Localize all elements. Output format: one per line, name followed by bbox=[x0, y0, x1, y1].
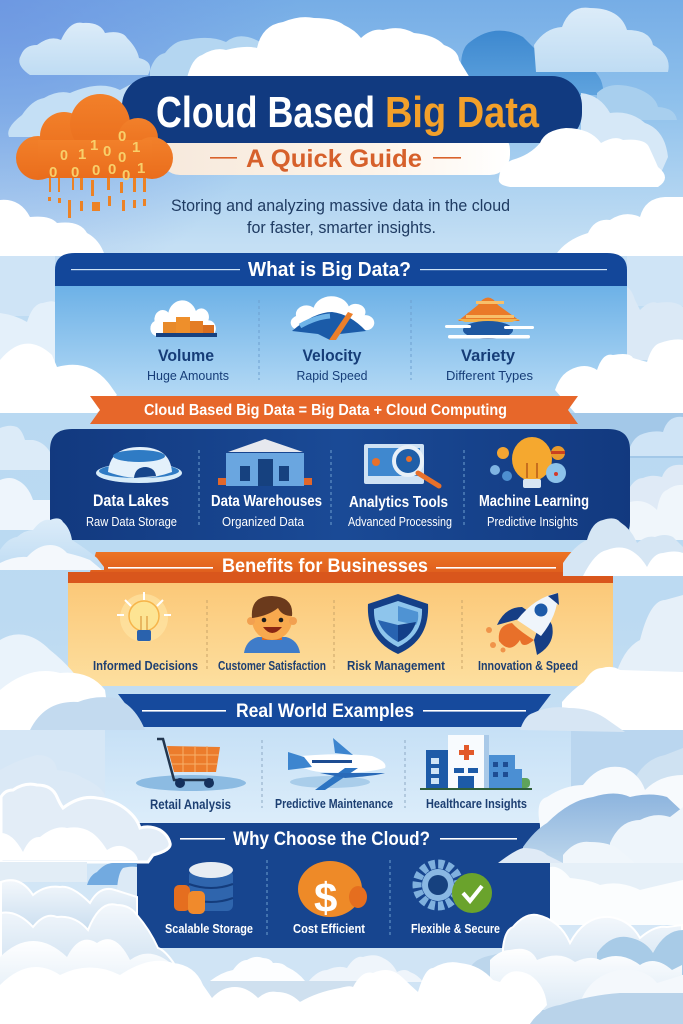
subtitle strip bbox=[160, 130, 510, 175]
item: flexible and secure bbox=[411, 864, 500, 936]
item: data lakes bbox=[86, 447, 182, 529]
icon: orange data cloud: 1 bbox=[90, 137, 98, 154]
panel body bbox=[55, 280, 627, 405]
item: scalable storage bbox=[165, 862, 253, 936]
icon: orange data cloud: 0 bbox=[71, 164, 79, 181]
title pill bbox=[122, 76, 582, 143]
panel header bbox=[55, 253, 627, 286]
intro text bbox=[171, 196, 510, 237]
item: volume: Volume bbox=[158, 347, 214, 365]
item: machine learning bbox=[479, 437, 589, 529]
panel: what is big data bbox=[55, 253, 627, 405]
icon: rocket bbox=[486, 593, 559, 655]
icon: warehouse bbox=[218, 439, 312, 486]
item: analytics tools: Analytics Tools bbox=[349, 494, 448, 511]
icon: orange data cloud: 0 bbox=[49, 164, 57, 181]
item: analytics tools bbox=[348, 444, 452, 529]
icon: shield bbox=[368, 594, 428, 654]
panel: why choose the cloud bbox=[137, 823, 550, 948]
icon: volume bbox=[150, 300, 217, 337]
icon: orange data cloud: 1 bbox=[137, 160, 145, 177]
panel body bbox=[105, 727, 571, 824]
front white bank bbox=[0, 961, 547, 1024]
foreground clouds lower left bbox=[0, 755, 170, 900]
item: innovation and speed bbox=[478, 593, 578, 673]
icon: orange data cloud: 0 bbox=[118, 128, 126, 145]
item: velocity: Velocity bbox=[302, 347, 362, 365]
right puffs back bbox=[503, 915, 682, 1015]
item: machine learning: Predictive Insights bbox=[487, 515, 578, 529]
icon: dollar coin: $ bbox=[314, 874, 337, 921]
item: cost efficient bbox=[293, 861, 367, 936]
item: informed decisions bbox=[93, 592, 198, 673]
equation ribbon bbox=[90, 396, 578, 424]
item: risk management bbox=[347, 594, 446, 673]
icon: orange data cloud: 0 bbox=[103, 143, 111, 160]
icon: orange data cloud: 0 bbox=[60, 147, 68, 164]
background clouds top bbox=[0, 8, 683, 316]
item: customer satisfaction bbox=[218, 596, 326, 673]
heading: Why Choose the Cloud? bbox=[233, 829, 430, 850]
item: scalable storage: Scalable Storage bbox=[165, 922, 253, 936]
item: variety: Different Types bbox=[446, 368, 533, 383]
item: variety bbox=[445, 298, 534, 383]
icon: orange data cloud: 0 bbox=[108, 161, 116, 178]
panel body bbox=[68, 583, 613, 686]
item: retail analysis: Retail Analysis bbox=[150, 797, 231, 812]
small cloud bbox=[210, 957, 305, 981]
item: data warehouses: Data Warehouses bbox=[211, 493, 322, 510]
sky band under panel bbox=[155, 948, 505, 1008]
panel: cloud tools bbox=[50, 429, 630, 540]
heading: What is Big Data? bbox=[248, 259, 411, 281]
panel header bbox=[118, 694, 551, 727]
clouds: bottom bank bbox=[0, 880, 683, 1024]
intro text: Storing and analyzing massive data in the cloud bbox=[171, 196, 510, 215]
clouds behind tools panel bbox=[0, 417, 683, 540]
item: predictive maintenance bbox=[275, 738, 393, 811]
icon: variety bbox=[445, 298, 534, 339]
item: data warehouses bbox=[211, 439, 322, 529]
icon: smiling face bbox=[244, 596, 300, 653]
icon: orange data cloud: 1 bbox=[78, 146, 86, 163]
item: velocity: Rapid Speed bbox=[296, 368, 368, 383]
icon: orange data cloud: 0 bbox=[122, 167, 130, 184]
item: velocity bbox=[291, 296, 374, 383]
item: innovation and speed: Innovation & Speed bbox=[478, 658, 578, 673]
white cloud right of title bbox=[499, 128, 665, 187]
foreground clouds mid left and right bbox=[0, 518, 683, 732]
lower right shade bbox=[530, 993, 683, 1024]
item: variety: Variety bbox=[461, 347, 516, 365]
icon: velocity bbox=[291, 296, 374, 340]
icon: hospital bbox=[420, 735, 532, 790]
item: analytics tools: Advanced Processing bbox=[348, 515, 452, 529]
item: machine learning: Machine Learning bbox=[479, 493, 589, 510]
item: customer satisfaction: Customer Satisfaction bbox=[218, 658, 326, 673]
item: data lakes: Data Lakes bbox=[93, 492, 169, 510]
left puffs back bbox=[1, 880, 137, 948]
icon: idea bulb bbox=[490, 437, 566, 488]
item: risk management: Risk Management bbox=[347, 658, 446, 673]
icon: orange data cloud: 0 bbox=[118, 149, 126, 166]
clouds beside what is big data panel bbox=[0, 287, 683, 413]
foreground clouds lower right bbox=[498, 748, 683, 925]
icon: gear and check bbox=[417, 864, 492, 913]
icon: orange data cloud: 0 bbox=[92, 162, 100, 179]
icon: lake bbox=[96, 447, 182, 483]
heading: Benefits for Businesses bbox=[222, 556, 428, 577]
item: flexible and secure: Flexible & Secure bbox=[411, 922, 500, 936]
item: informed decisions: Informed Decisions bbox=[93, 658, 198, 673]
title banner: Big Data bbox=[385, 88, 539, 137]
icon: orange data cloud: 1 bbox=[132, 139, 140, 156]
item: data lakes: Raw Data Storage bbox=[86, 515, 177, 529]
item: cost efficient: Cost Efficient bbox=[293, 922, 366, 936]
panel: benefits bbox=[68, 552, 613, 686]
icon: database bbox=[174, 862, 233, 914]
equation ribbon: Cloud Based Big Data = Big Data + Cloud Computing bbox=[144, 402, 507, 419]
icon: lightbulb bbox=[117, 592, 171, 642]
item: data warehouses: Organized Data bbox=[222, 515, 304, 529]
icon: analytics bbox=[364, 444, 439, 486]
title banner bbox=[122, 76, 582, 175]
item: volume bbox=[147, 300, 229, 383]
item: healthcare insights: Healthcare Insights bbox=[426, 796, 527, 811]
intro text: for faster, smarter insights. bbox=[247, 218, 436, 237]
item: healthcare insights bbox=[420, 735, 532, 811]
subheading: A Quick Guide bbox=[246, 145, 422, 173]
pale cloud bbox=[308, 955, 423, 982]
item: predictive maintenance: Predictive Maintenance bbox=[275, 796, 393, 811]
icon: airplane bbox=[288, 738, 385, 790]
heading: Real World Examples bbox=[236, 701, 414, 722]
item: retail analysis bbox=[136, 739, 246, 812]
title text: Cloud Based bbox=[156, 88, 375, 137]
panel header bbox=[68, 552, 613, 583]
item: volume: Huge Amounts bbox=[147, 368, 229, 383]
panel: real world examples bbox=[105, 694, 571, 824]
icon: orange data cloud bbox=[16, 94, 173, 218]
icon: shopping cart bbox=[136, 739, 246, 791]
